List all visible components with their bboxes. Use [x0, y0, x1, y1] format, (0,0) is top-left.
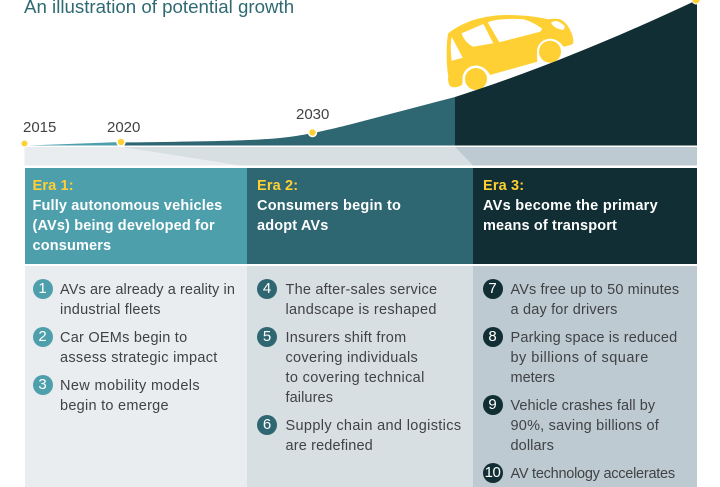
item 9: 90%, saving billions of: [510, 418, 659, 434]
item 2: assess strategic impact: [60, 350, 218, 366]
panel: era 3 header: AVs become the primary: [483, 198, 658, 214]
item 2: 2: [38, 328, 47, 345]
item 7: 7: [488, 280, 497, 297]
item 1: industrial fleets: [60, 302, 161, 318]
panel: era 1 list: [24, 266, 247, 487]
item 6: 6: [263, 416, 271, 433]
item 5: covering individuals: [286, 350, 418, 366]
item 4: The after-sales service: [286, 282, 437, 298]
item 8: Parking space is reduced: [510, 330, 677, 346]
item 3: begin to emerge: [60, 398, 169, 414]
panel: era 1 header: consumers: [32, 238, 111, 254]
panel: era 2 list: [247, 266, 473, 487]
panel: era 1 header: (AVs) being developed for: [32, 218, 215, 234]
item 5: failures: [286, 390, 333, 406]
panel: era 1 header: [24, 168, 247, 264]
car icon: [447, 15, 573, 92]
item 7: [483, 279, 679, 318]
panel: era 2 header: adopt AVs: [257, 218, 328, 234]
item 4: [257, 279, 437, 318]
item 8: 8: [488, 328, 497, 345]
item 7: AVs free up to 50 minutes: [510, 282, 679, 298]
item 2: [33, 327, 218, 366]
panel: era 3 header: means of transport: [483, 218, 617, 234]
panel: era 3 list: [473, 266, 697, 487]
growth curve chart with car: [22, 0, 700, 166]
band shading: [24, 147, 697, 166]
era 2 area: [121, 97, 455, 146]
item 9: [483, 395, 659, 454]
item 1: [33, 279, 235, 318]
item 4: landscape is reshaped: [286, 302, 437, 318]
panel: era 2 header: Consumers begin to: [257, 198, 401, 214]
item 9: Vehicle crashes fall by: [510, 398, 655, 414]
panel: era 3 header: Era 3:: [483, 178, 524, 194]
item 6: [257, 415, 461, 454]
panel: era 2 header: [247, 168, 473, 264]
item 10: AV technology accelerates: [510, 466, 675, 482]
item 1: AVs are already a reality in: [60, 282, 235, 298]
year 2015: 2015: [23, 119, 56, 136]
year 2020: 2020: [107, 119, 140, 136]
item 5: 5: [263, 328, 271, 345]
item 5: [257, 327, 425, 406]
item 8: [483, 327, 677, 386]
item 5: Insurers shift from: [286, 330, 406, 346]
item 10: [483, 463, 675, 483]
item 6: are redefined: [286, 438, 373, 454]
item 2: Car OEMs begin to: [60, 330, 187, 346]
era 1 area: [28, 142, 121, 146]
item 8: by billions of square: [510, 350, 649, 366]
item 1: 1: [38, 280, 47, 297]
item 4: 4: [263, 280, 271, 297]
item 5: to covering technical: [286, 370, 425, 386]
panel: era 3 header: [473, 168, 697, 264]
era 3 area: [455, 0, 697, 146]
item 7: a day for drivers: [510, 302, 618, 318]
item 3: New mobility models: [60, 378, 200, 394]
item 10: 10: [485, 464, 500, 481]
item 9: dollars: [510, 438, 554, 454]
timeline dots: [21, 0, 700, 147]
item 3: [33, 375, 200, 414]
panel: era 2 header: Era 2:: [257, 178, 298, 194]
item 6: Supply chain and logistics: [286, 418, 461, 434]
item 3: 3: [38, 376, 47, 393]
year 2030: 2030: [296, 106, 329, 123]
panel: era 1 header: Fully autonomous vehicles: [32, 198, 222, 214]
item 8: meters: [510, 370, 555, 386]
item 9: 9: [488, 396, 497, 413]
panel: era 1 header: Era 1:: [32, 178, 74, 194]
